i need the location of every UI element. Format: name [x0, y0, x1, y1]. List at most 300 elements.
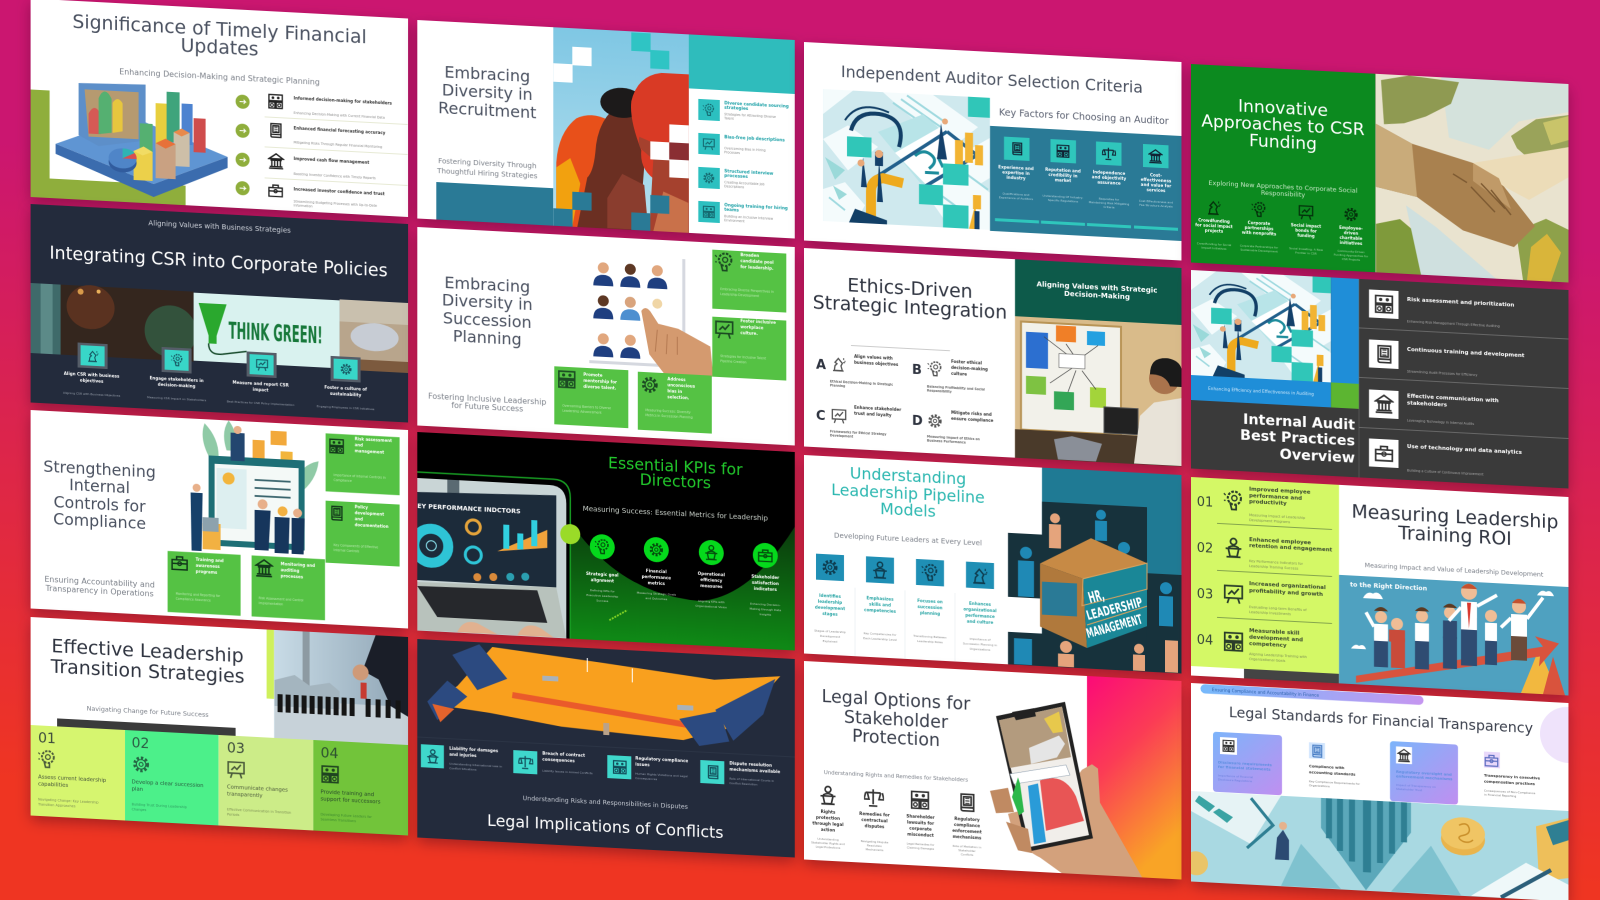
subtitle	[436, 158, 538, 180]
pipeline columns: leadership	[818, 599, 842, 605]
quadrant items A to D: A	[816, 358, 826, 373]
step 03: Effective Communication in Transition	[227, 807, 291, 815]
pipeline columns: organizational	[963, 606, 997, 613]
header text: Decision-Making	[1064, 289, 1130, 301]
title: Ethics-Driven	[847, 275, 973, 303]
photo: three profiles	[553, 27, 689, 233]
bottom illustration: financial district	[1184, 791, 1569, 900]
outcome list	[1197, 484, 1333, 666]
legal risks row: mechanisms available	[729, 767, 780, 774]
green cards: documentation	[355, 522, 389, 529]
list: four benefits: Improved cash flow management	[294, 156, 369, 165]
title: Protection	[852, 727, 940, 751]
photo: leadership cube: LEADERSHIP	[1085, 595, 1145, 624]
green cards: Pipeline Creation	[720, 359, 747, 364]
list: hiring steps: Processes	[724, 150, 740, 155]
factors band: Experience and	[998, 164, 1034, 171]
title: Funding	[1249, 131, 1317, 155]
green cards: Leadership Advancement	[562, 409, 602, 415]
four policy pillars: Best Practices for CSR Policy Implementation	[227, 399, 294, 407]
subtitle: Thoughtful Hiring Strategies	[436, 166, 538, 180]
step 01: Assess current leadership	[38, 774, 107, 784]
pipeline columns: stages	[822, 611, 838, 617]
funding options: Frontier in CSR	[1295, 251, 1317, 256]
title	[439, 66, 536, 118]
step 04	[313, 740, 408, 836]
legal risks row: issues	[635, 762, 650, 767]
standards cards: Disclosure Regulations	[1218, 777, 1252, 783]
green cards: and	[355, 516, 363, 522]
four policy pillars: Foster a culture of	[324, 385, 367, 392]
title: Stakeholder	[844, 708, 949, 733]
legal risks row: Role of International Courts in	[729, 777, 774, 783]
green cards: awareness	[196, 563, 220, 569]
subtitle: Ensuring Accountability and	[44, 575, 155, 590]
title: Strategic Integration	[813, 292, 1007, 324]
funding options: CSR Projects	[1342, 257, 1361, 262]
list: best practices: Use of technology and data analytics	[1407, 444, 1523, 456]
legal risks row: Liability for damages	[449, 746, 499, 753]
green cards: and	[355, 442, 363, 448]
photo: laptop dashboard: EY PERFORMANCE INDCTORS	[417, 503, 521, 515]
funding options: Crowdfunding	[1198, 217, 1230, 224]
panel: Measuring Leadership Training ROI	[1191, 477, 1569, 696]
factors band: Maintaining Risk Mitigating	[1089, 200, 1129, 206]
green cards: Measuring Success: Diversity	[645, 408, 691, 414]
KPI columns: Insights	[759, 612, 772, 617]
funding options	[1195, 199, 1369, 262]
pipeline columns: performance	[965, 613, 995, 619]
step 02	[125, 730, 219, 825]
outcome list: Enhanced employee	[1249, 537, 1311, 546]
legal remedies columns: corporate	[909, 826, 932, 832]
factors band: credibility in	[1048, 172, 1078, 179]
dark bar	[57, 718, 236, 736]
KPI columns: and Outcomes	[645, 596, 668, 601]
step 04: 04	[321, 745, 338, 762]
green cards: management	[355, 448, 384, 455]
image: candidate cards and hand	[586, 251, 713, 378]
outcome list: Development Programs	[1249, 518, 1290, 524]
funding options: Corporate	[1248, 220, 1271, 226]
standards cards: Impact of Transparency on	[1396, 783, 1436, 789]
step 03: Periods	[227, 812, 240, 817]
subtitle: Measuring Success: Essential Metrics for Leadership	[583, 504, 768, 523]
panel: Integrating CSR into Corporate Policies	[31, 204, 409, 423]
four policy pillars: Engage stakeholders in	[150, 375, 204, 383]
list: hiring steps	[698, 99, 789, 227]
factors band: Reputation and	[1045, 167, 1081, 174]
list: hiring steps: teams	[724, 207, 739, 213]
panel: Understanding Leadership Pipeline Models	[804, 455, 1182, 675]
title: Independent Auditor Selection Criteria	[841, 62, 1143, 97]
panel: Essential KPIs for Directors	[414, 432, 795, 651]
header text: Aligning Values with Strategic	[1037, 279, 1157, 295]
list: hiring steps: Diverse candidate sourcing	[724, 100, 789, 109]
quadrant items A to D: ensure compliance	[951, 416, 994, 423]
step 01: Transition Approaches	[37, 802, 76, 808]
quadrant items A to D: trust and loyalty	[854, 411, 892, 418]
step 03: 03	[227, 740, 245, 757]
green cards: workplace	[740, 324, 764, 330]
list: four benefits: Increased investor confidence and trust	[294, 186, 385, 196]
KPI columns: Aligning KPIs with	[698, 599, 725, 604]
green cards: Broaden	[740, 252, 759, 258]
panel: Legal Standards for Financial Transparency	[1184, 683, 1596, 900]
list: hiring steps: Ongoing training for hiring	[724, 202, 788, 211]
subtitle: Transparency in Operations	[45, 584, 154, 599]
funding options: Impact Initiatives	[1201, 246, 1227, 251]
title: Legal Standards for Financial Transparency	[1229, 705, 1533, 737]
subtitle: Fostering Inclusive Leadership	[428, 392, 546, 407]
legal remedies columns: Stakeholder Rights and	[811, 840, 845, 846]
title: Strengthening	[43, 457, 156, 482]
standards cards	[1213, 732, 1540, 809]
funding options: initiatives	[1340, 240, 1363, 246]
title: Training ROI	[1397, 523, 1512, 550]
outcome list: profitability and growth	[1249, 588, 1323, 598]
green cards: Monitoring and Reporting for	[176, 592, 221, 598]
title: Planning	[453, 326, 522, 349]
panel: Ethics-Driven Strategic Integration	[804, 248, 1182, 468]
list: four benefits: Enhancing Decision-Making with Current Financial Data	[294, 111, 385, 120]
title: Embracing	[444, 273, 530, 296]
quadrant items A to D: B	[912, 363, 922, 378]
quadrant items A to D: Foster ethical	[951, 359, 983, 365]
legal risks row: Conflict Situations	[449, 766, 477, 772]
green cards: Internal Controls	[334, 548, 360, 553]
funding options: projects	[1205, 228, 1224, 234]
lime accent	[267, 630, 274, 699]
green cards	[554, 241, 786, 438]
green cards: selection.	[667, 394, 690, 400]
outcome list: productivity	[1249, 499, 1287, 507]
funding options: charitable	[1340, 235, 1363, 241]
dark green header	[1015, 259, 1182, 325]
list: four benefits: Boosting Investor Confidence with Timely Reports	[294, 172, 376, 180]
legal remedies columns: Mechanisms	[866, 847, 884, 852]
outcome list: competency	[1249, 641, 1287, 649]
list: four benefits: Informed decision-making for stakeholders	[294, 95, 393, 106]
quadrant items A to D	[816, 352, 994, 446]
pipeline columns: Identifies	[819, 593, 841, 599]
legal remedies columns: mechanisms	[953, 834, 982, 840]
outcome list: Leadership Training Success	[1249, 564, 1299, 571]
illustration: isometric audit	[1191, 270, 1331, 382]
green cards: Monitoring and	[281, 561, 315, 568]
step 04: support for successors	[321, 796, 381, 806]
step 03: transparently	[227, 791, 263, 799]
list: four benefits: Enhanced financial forecasting accuracy	[294, 125, 386, 135]
list: four benefits: Information	[294, 203, 313, 208]
green cards: diverse talent.	[583, 384, 617, 391]
legal remedies columns: enforcement	[952, 828, 982, 834]
standards cards: Transparency in executive	[1484, 773, 1540, 781]
panel: Independent Auditor Selection Criteria	[804, 42, 1182, 261]
standards cards: Key Compliance Requirements for	[1309, 779, 1361, 786]
step 03: Communicate changes	[227, 784, 288, 794]
pipeline columns: Enhances	[969, 601, 992, 607]
title	[1202, 99, 1364, 153]
legal remedies columns: Stakeholder	[958, 848, 976, 853]
factors band: Fee Structure Analysis	[1139, 203, 1173, 209]
step 01: 01	[38, 730, 56, 747]
title: Compliance	[53, 509, 146, 533]
legal remedies columns: lawsuits for	[907, 819, 934, 826]
outcome list: Key Performance Indicators for	[1249, 559, 1303, 566]
outcome list: 01	[1197, 495, 1213, 511]
list: best practices: Leveraging Technology in Internal Audits	[1407, 418, 1474, 426]
title: Models	[880, 499, 936, 521]
pipeline columns: Key Competencies for	[864, 631, 897, 637]
olive block	[31, 90, 186, 205]
pipeline columns: Emphasizes	[866, 595, 894, 602]
green cards: Risk assessment	[355, 436, 392, 443]
arrow bullets	[236, 94, 250, 196]
step 01: Navigating Change: Key Leadership	[38, 797, 99, 805]
pipeline columns: Development	[820, 634, 841, 639]
standards cards: accounting standards	[1309, 769, 1356, 777]
panel: Internal Audit Best Practices Overview	[1191, 270, 1569, 489]
KPI columns: Success	[596, 598, 609, 603]
KPI columns: performance	[642, 574, 671, 580]
list: best practices: stakeholders	[1407, 400, 1448, 409]
list: hiring steps: Overcoming Bias in Hiring	[724, 146, 766, 152]
KPI columns: alignment	[591, 577, 614, 583]
standards cards: Consequences of Non-Compliance	[1484, 789, 1535, 795]
step 02: Develop a clear succession	[132, 779, 204, 789]
list: hiring steps: Strategies for Attracting Diverse	[724, 112, 776, 119]
list: hiring steps: Creating Accountable Job	[724, 180, 764, 186]
list: four benefits	[236, 92, 408, 213]
subtitle: Fostering Diversity Through	[438, 156, 536, 170]
legal remedies columns: disputes	[865, 823, 885, 829]
step 01: capabilities	[38, 781, 68, 789]
quadrant items A to D: Balancing Profitability and Social	[927, 385, 985, 392]
subtitle: Exploring New Approaches to Corporate Social	[1208, 179, 1358, 195]
standards cards: Disclosure requirements	[1218, 759, 1272, 767]
subtitle: Measuring Impact and Value of Leadership Development	[1365, 562, 1544, 579]
green cards: development	[355, 510, 384, 517]
title	[608, 453, 743, 494]
standards cards: Organizations	[1309, 783, 1330, 788]
legal remedies columns: Rights	[821, 809, 836, 815]
quadrant items A to D: Enhance stakeholder	[854, 405, 901, 412]
subtitle	[44, 575, 155, 599]
green pendulum dot	[560, 524, 580, 545]
legal remedies columns: Claiming Damages	[907, 845, 935, 851]
caption: Enhancing Efficiency and Effectiveness in Auditing	[1208, 386, 1314, 397]
factors band: Specific Regulations	[1048, 198, 1079, 204]
factors band: Cost-	[1150, 172, 1162, 178]
four policy pillars: Align CSR with business	[64, 371, 120, 379]
list: hiring steps: Environment	[724, 218, 745, 223]
standards cards: compensation practices	[1484, 779, 1536, 786]
standards cards: for financial statements	[1218, 764, 1271, 772]
list: best practices: Building a Culture of Continuous Improvement	[1407, 468, 1484, 477]
funding options: partnerships	[1245, 225, 1274, 231]
legal risks row	[421, 744, 780, 788]
photo: man at whiteboard	[1015, 316, 1182, 468]
outcome list: development and	[1249, 635, 1303, 643]
illustration: isometric audit	[823, 89, 990, 230]
outcome list: Increased organizational	[1249, 581, 1326, 591]
KPI columns: indicators	[754, 586, 777, 592]
funding options: Community-Driven	[1337, 249, 1365, 254]
green cards: Overcoming Barriers to Diverse	[562, 404, 611, 410]
panel: Significance of Timely Financial Updates	[31, 0, 408, 217]
list: best practices: Streamlining Audit Processes for Efficiency	[1407, 369, 1477, 377]
subtitle: Navigating Change for Future Success	[87, 704, 209, 719]
illustration: orange handshake	[427, 642, 780, 750]
title	[442, 273, 533, 350]
green cards: for leadership.	[740, 264, 774, 271]
funding options: bonds for	[1295, 228, 1317, 234]
green cards: Leadership Development	[720, 292, 760, 298]
legal risks row: Liability Issues in Armed Conflicts	[542, 769, 593, 775]
legal remedies columns	[811, 786, 982, 857]
funding options: for social impact	[1195, 222, 1233, 229]
title: Internal	[69, 475, 130, 497]
factors band: assurance	[1097, 180, 1121, 186]
title: Diversity in	[442, 290, 533, 314]
KPI columns: Strategic goal	[586, 571, 619, 578]
factors band: market	[1055, 177, 1071, 183]
title: Approaches to CSR	[1201, 112, 1365, 140]
green cards: Foster inclusive	[740, 318, 776, 325]
quadrant items A to D: decision-making	[951, 365, 988, 372]
standards cards: in Financial Reporting	[1484, 793, 1516, 798]
list: best practices: Risk assessment and prioritization	[1407, 297, 1514, 309]
quadrant items A to D: Frameworks for Ethical Strategy	[830, 429, 886, 436]
photo: leadership cube: MANAGEMENT	[1085, 612, 1144, 642]
gradient panel	[1087, 676, 1182, 880]
illustration: compliance team	[191, 418, 319, 557]
outcome list: 03	[1197, 587, 1213, 603]
factors band: effectiveness	[1141, 177, 1172, 183]
factors band: expertise in	[1002, 170, 1030, 176]
four policy pillars: Engaging Employees in CSR Initiatives	[317, 404, 375, 411]
factors band: and objectivity	[1092, 174, 1127, 181]
step 04: Seamless Transitions	[321, 817, 356, 823]
legal risks row: and injuries	[449, 752, 477, 758]
top caption: Aligning Values with Business Strategies	[148, 218, 291, 235]
funding options: Social impact	[1291, 222, 1321, 229]
panel: Legal Implications of Conflicts	[417, 639, 795, 858]
funding options: Social Investing: A New	[1289, 246, 1324, 252]
subtitle: Enhancing Decision-Making and Strategic Planning	[119, 67, 320, 87]
pipeline columns: Each Leadership Level	[863, 636, 897, 642]
quadrant items A to D: business objectives	[854, 360, 899, 367]
row icons	[269, 94, 283, 197]
legal remedies columns: misconduct	[907, 831, 934, 838]
green cards: Strategies for Inclusive Talent	[720, 354, 767, 361]
image: Think Green	[194, 293, 340, 368]
four policy pillars: objectives	[80, 378, 104, 384]
list: hiring steps: strategies	[724, 105, 749, 111]
green cards: bias in	[667, 388, 682, 394]
legal risks row: Breach of contract	[542, 751, 585, 758]
panel: Strengthening Internal Controls for Compliance	[31, 410, 408, 629]
pill caption	[1200, 684, 1424, 705]
four policy pillars: decision-making	[158, 382, 196, 389]
quadrant items A to D: Align values with	[854, 354, 893, 361]
funding options: with nonprofits	[1242, 230, 1277, 237]
photo: executive moving figures	[274, 630, 409, 745]
subtitle: for Future Success	[451, 401, 523, 414]
KPI columns: satisfaction	[752, 580, 779, 586]
title	[814, 278, 1006, 320]
outcome list: 02	[1197, 541, 1213, 557]
green cards: candidate pool	[740, 258, 774, 265]
title: Leadership Pipeline	[831, 480, 985, 507]
title: Legal Implications of Conflicts	[487, 811, 723, 842]
pill caption: Ensuring Compliance and Accountability in Finance	[1212, 687, 1319, 698]
legal risks row: Conflict Resolution	[729, 781, 757, 787]
title: Best Practices	[1240, 428, 1355, 450]
quadrant items A to D: Development	[830, 433, 854, 439]
title	[1240, 412, 1355, 467]
four policy pillars: Aligning CSR with Business Objectives	[63, 391, 121, 398]
step 02: Building Trust During Leadership	[132, 802, 187, 809]
green cards: Metrics in Succession Planning	[645, 413, 693, 420]
standards cards: Importance of Financial	[1218, 773, 1253, 779]
legal remedies columns: compliance	[954, 822, 980, 828]
photo: handshake over map	[1376, 74, 1569, 283]
outcome list: Aligning Leadership Training with	[1249, 652, 1307, 659]
standards cards: Regulatory oversight and	[1396, 769, 1452, 777]
teal panel	[1042, 468, 1182, 674]
quadrant items A to D: Responsibility	[927, 389, 952, 394]
outcome list: Measuring Impact of Leadership	[1249, 513, 1306, 520]
subtitle: Understanding Rights and Remedies for Stakeholders	[824, 770, 968, 784]
title: Embracing	[444, 62, 530, 86]
KPI columns: Financial	[646, 568, 667, 574]
factors band: Criteria	[1103, 205, 1115, 209]
list: best practices: Enhancing Risk Management Through Effective Auditing	[1407, 319, 1500, 328]
funding options: Employee-	[1339, 225, 1363, 231]
title: Internal Audit	[1243, 412, 1355, 434]
title: Legal Options for	[822, 687, 971, 715]
panel: Effective Leadership Transition Strategies	[31, 617, 409, 836]
dark teal block	[436, 182, 553, 226]
outcome list: Evaluating Long-term Benefits of	[1249, 605, 1307, 612]
subtitle: Understanding Risks and Responsibilities in Disputes	[523, 795, 688, 811]
list: hiring steps: Bias-free job descriptions	[724, 134, 785, 143]
green cards: culture.	[740, 330, 758, 336]
title	[822, 687, 971, 753]
quadrant items A to D: C	[816, 409, 826, 424]
blue strip	[1191, 270, 1359, 409]
quadrant items A to D: Business Performance	[927, 439, 966, 445]
title	[50, 635, 245, 688]
factors band: Requisites for	[1099, 197, 1120, 202]
panel: Embracing Diversity in Recruitment	[417, 20, 795, 239]
heading: Updates	[181, 35, 259, 61]
list: four benefits: Mitigating Risks Through Regular Financial Monitoring	[294, 140, 382, 149]
step 04: Provide training and	[321, 789, 374, 798]
quadrant items A to D: D	[912, 414, 923, 429]
KPI columns: Making through Data	[749, 607, 781, 612]
KPI columns: efficiency	[700, 577, 723, 583]
green cards: mentorship for	[583, 378, 617, 385]
pipeline columns: succession	[918, 604, 943, 610]
factors band: and value for	[1141, 182, 1171, 188]
green accent	[1331, 382, 1359, 409]
factors band	[990, 126, 1182, 241]
pipeline columns: and culture	[967, 619, 993, 625]
list: best practices	[1359, 279, 1569, 489]
